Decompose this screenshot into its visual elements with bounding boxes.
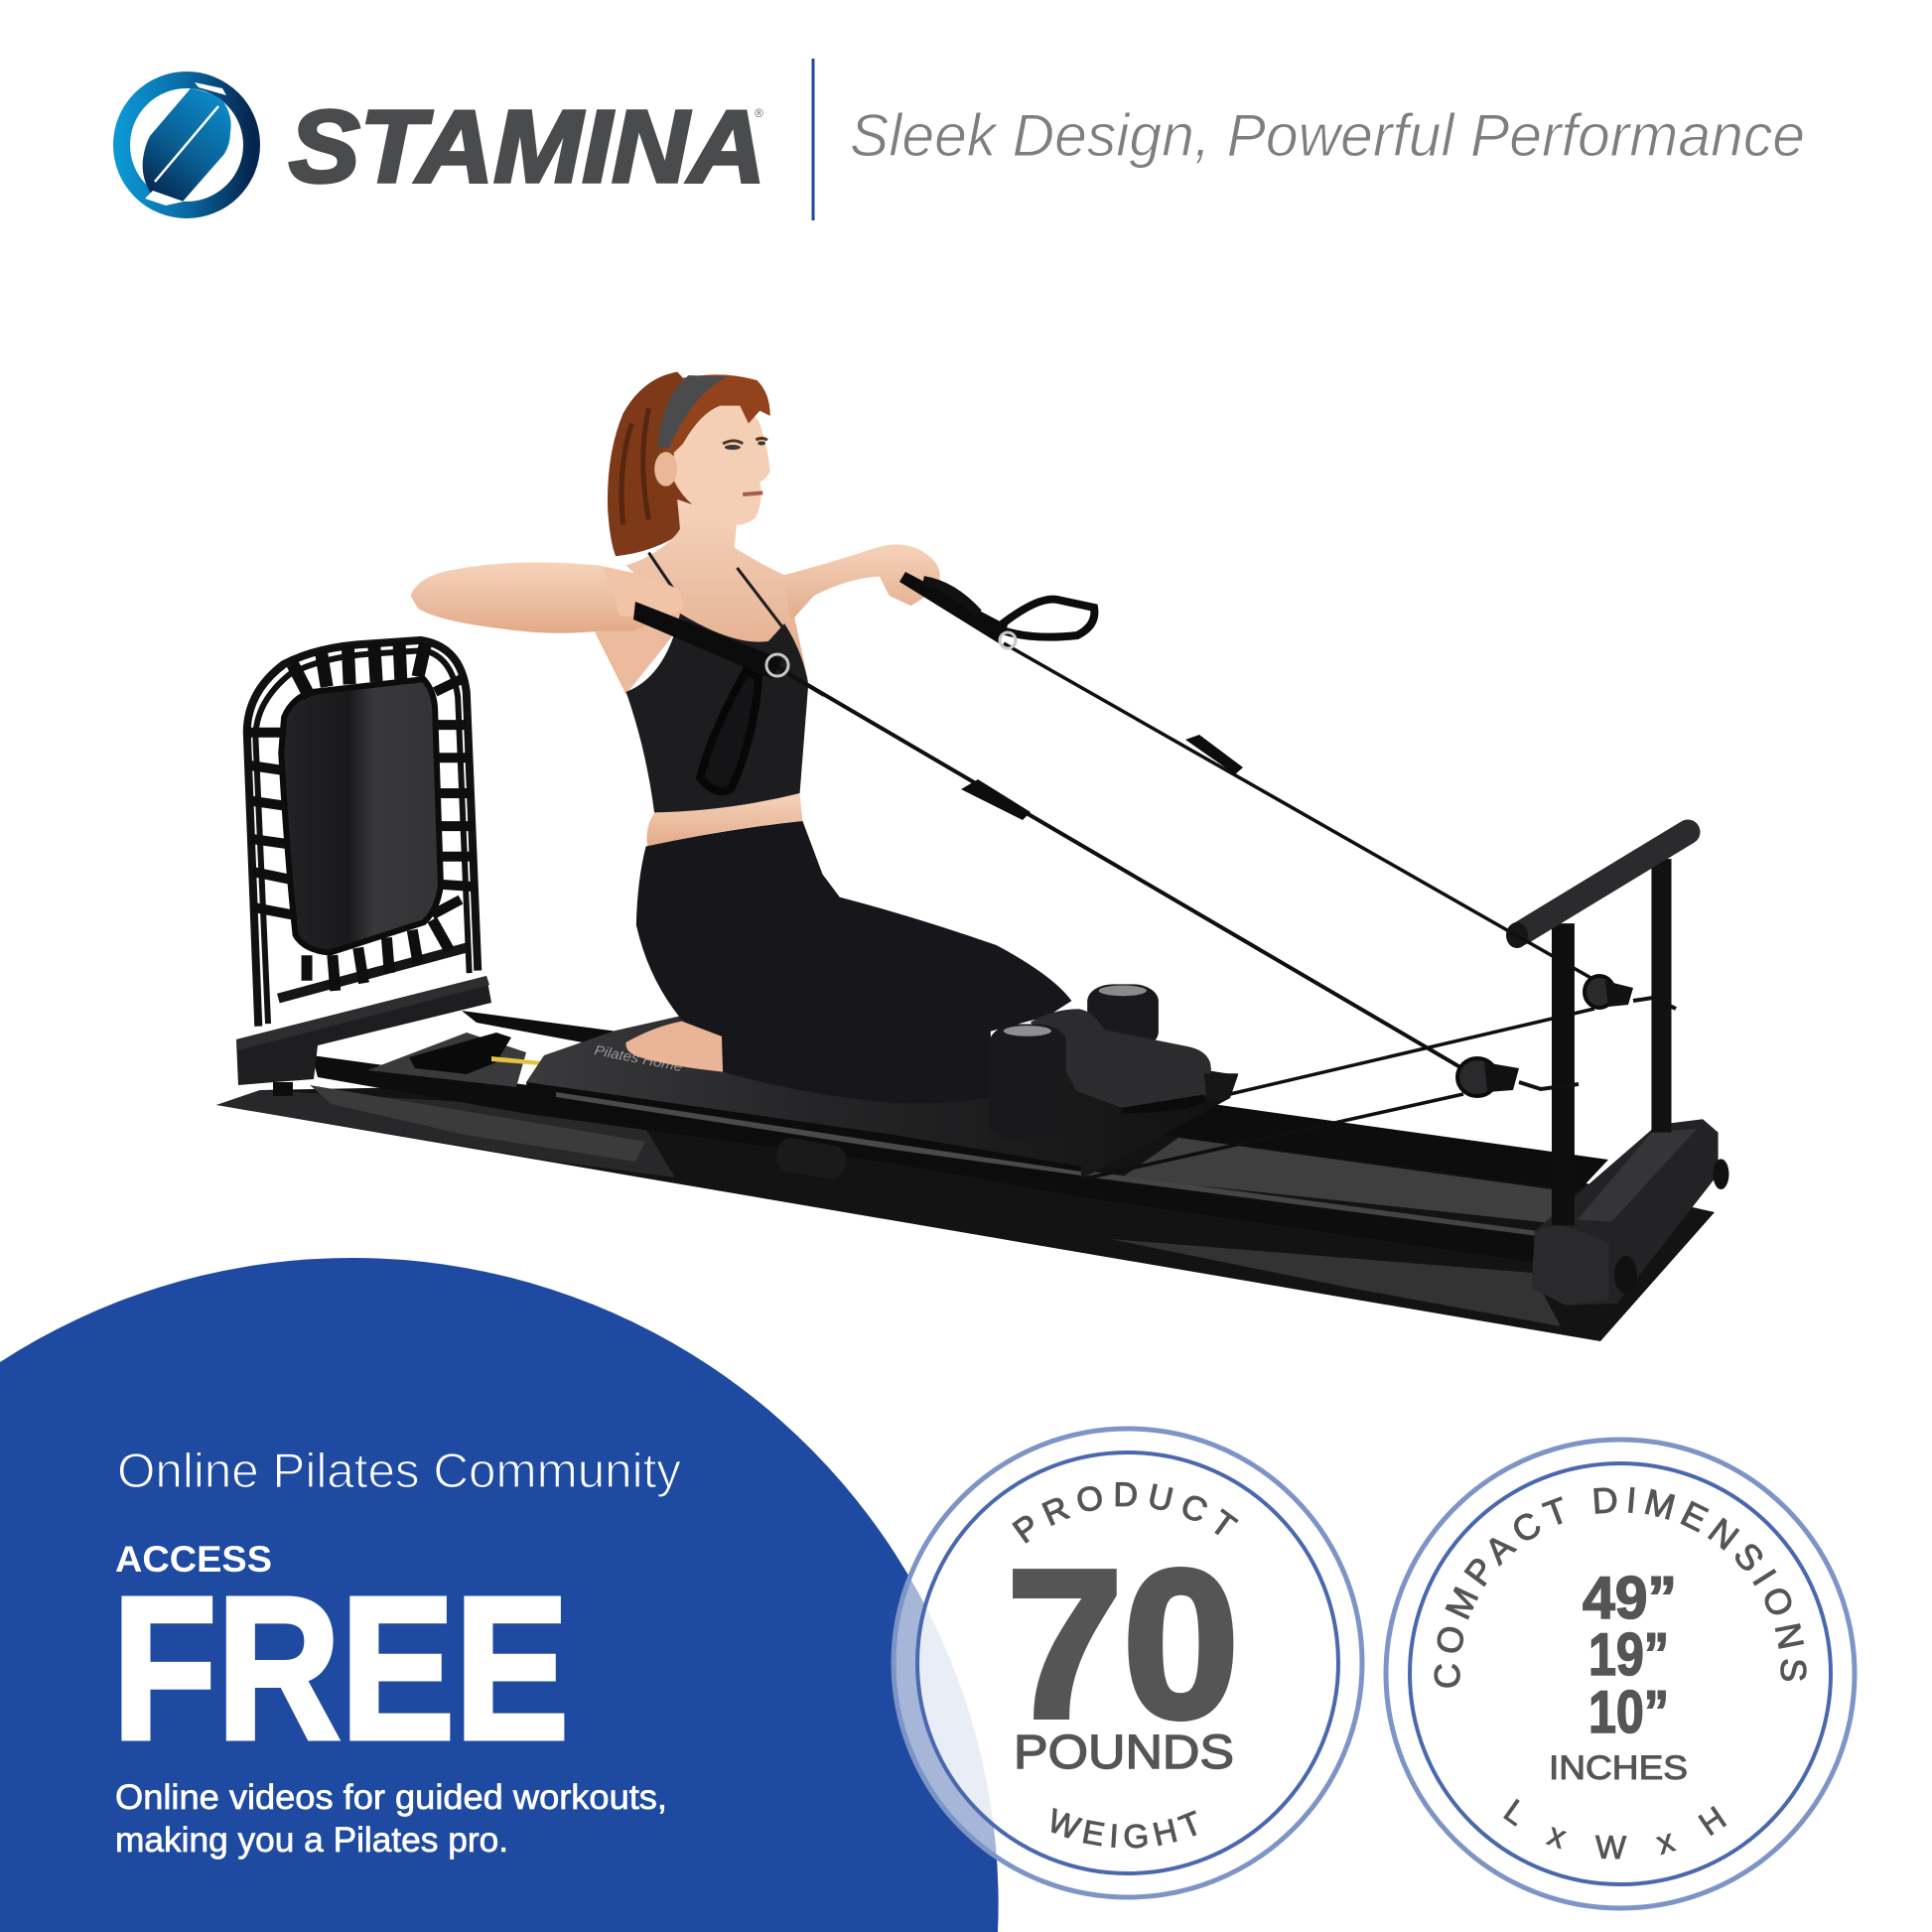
resistance cables [777, 643, 1594, 1179]
description: making you a Pilates pro. [115, 1821, 508, 1860]
left arm [411, 562, 683, 633]
carriage: Pilates Home [593, 1041, 684, 1074]
description [115, 1778, 667, 1860]
hair back [608, 371, 712, 556]
midriff [646, 793, 802, 847]
badge: compact dimensions [1384, 1438, 1857, 1910]
dimensions list: 19” [1588, 1621, 1669, 1688]
subtitle: Online Pilates Community [117, 1445, 682, 1498]
header divider [812, 59, 814, 220]
tank top [625, 614, 808, 813]
badge: product weight [892, 1426, 1364, 1900]
carriage [526, 1013, 1238, 1183]
logo: Stamina circular emblem [121, 79, 252, 210]
upper padded bar [1506, 832, 1688, 948]
dimensions list: 49” [1583, 1565, 1677, 1631]
reformer rails [312, 1011, 1608, 1263]
jump board [247, 640, 478, 1027]
woman [411, 371, 1071, 1103]
hanging strap loop [700, 672, 759, 791]
headrest and front shoulder rest [989, 1009, 1238, 1142]
product photo: woman on Pilates reformer [216, 371, 1728, 1341]
leggings [636, 821, 1071, 1103]
left handle strap [633, 602, 824, 695]
right arm [782, 544, 940, 621]
curved label: product: PRODUCT [1012, 1481, 1239, 1544]
bangs and hair front [663, 374, 770, 454]
eyes and lips [723, 438, 767, 494]
ear [654, 452, 677, 486]
description: Online videos for guided workouts, [115, 1778, 667, 1817]
back shoulder rest [1087, 984, 1159, 1048]
headband [657, 375, 729, 449]
tagline: Sleek Design, Powerful Performance [850, 102, 1805, 169]
unit: POUNDS [1014, 1726, 1234, 1779]
dimensions list: 10” [1588, 1679, 1669, 1745]
blue semicircle panel [0, 1258, 999, 1932]
neck and shoulders [625, 499, 808, 682]
face [673, 400, 770, 525]
foot-end frame [1532, 859, 1728, 1306]
logo: STAMINA wordmark: STAMINA [289, 89, 765, 204]
curved label: compact dimensions: COMPACT DIMENSIONS [1434, 1487, 1807, 1688]
upper back of left arm [592, 570, 689, 694]
weight value: 70 [1007, 1526, 1239, 1761]
floor mat [216, 1082, 1715, 1341]
jump board base block [236, 976, 491, 1096]
pulleys and hooks [1457, 976, 1676, 1096]
foot [625, 1022, 723, 1072]
panel text: online community [112, 1445, 682, 1860]
logo: STAMINA wordmark: ® [755, 106, 763, 120]
access label: ACCESS [115, 1539, 272, 1580]
dimensions list [1583, 1565, 1677, 1745]
curved label: weight: WEIGHT [1051, 1807, 1197, 1849]
left hand [604, 568, 684, 619]
right handle strap [899, 572, 1094, 648]
FREE headline: FREE [112, 1555, 569, 1782]
unit: INCHES [1549, 1749, 1688, 1787]
curved label: L x W x H: L x W x H [1503, 1799, 1727, 1859]
